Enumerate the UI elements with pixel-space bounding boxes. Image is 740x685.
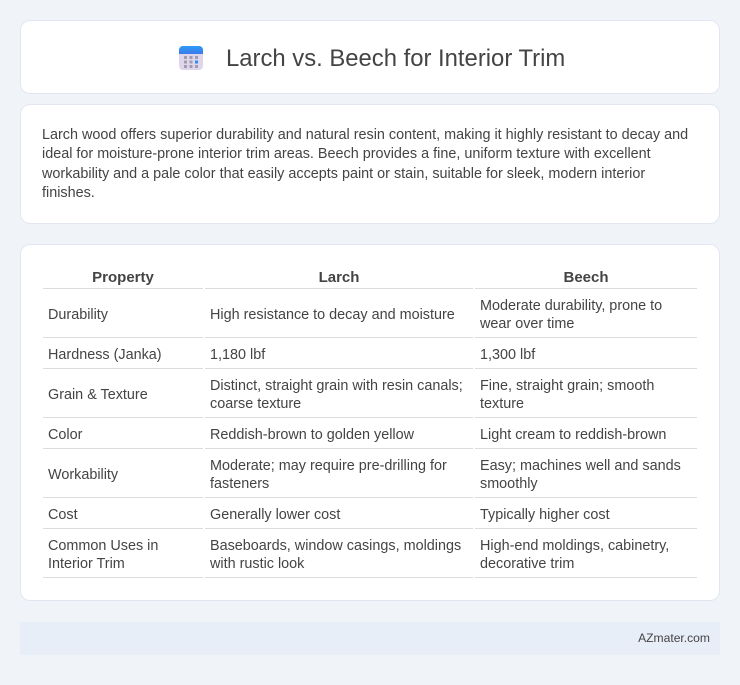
title: Larch vs. Beech for Interior Trim (226, 45, 565, 72)
table header: Property (92, 269, 154, 286)
row: color: Reddish-brown to golden yellow (210, 427, 414, 443)
row: common uses: Common Uses in (48, 538, 158, 554)
row: hardness: 1,300 lbf (480, 347, 535, 363)
row: color: Light cream to reddish-brown (480, 427, 666, 443)
row: workability: smoothly (480, 476, 538, 492)
row: common uses (48, 538, 669, 572)
row: durability (48, 298, 662, 332)
row: cost (48, 507, 610, 523)
panel: summary card (20, 104, 720, 224)
row: common uses: with rustic look (210, 556, 304, 572)
row: workability: fasteners (210, 476, 269, 492)
row: workability (48, 458, 681, 492)
row lines (43, 337, 697, 578)
row: color (48, 427, 666, 443)
icon: calendar (179, 46, 203, 70)
row: common uses: High-end moldings, cabinetry, (480, 538, 669, 554)
row: grain and texture: texture (480, 396, 524, 412)
row: cost: Typically higher cost (480, 507, 610, 523)
row: grain and texture (48, 378, 654, 412)
summary text (42, 127, 688, 201)
row: durability: wear over time (480, 316, 574, 332)
row: grain and texture: Distinct, straight grain with resin canals; (210, 378, 463, 394)
row: workability: Moderate; may require pre-drilling for (210, 458, 447, 474)
panel: title card (20, 20, 720, 94)
row: durability: Moderate durability, prone to (480, 298, 662, 314)
summary text: finishes. (42, 185, 95, 201)
footer bar (20, 622, 720, 655)
table header: Beech (563, 269, 609, 286)
row: grain and texture: Grain & Texture (48, 387, 148, 403)
summary text: Larch wood offers superior durability and natural resin content, making it highly resistant to decay and (42, 127, 688, 143)
row: common uses: Interior Trim (48, 556, 125, 572)
row: durability: Durability (48, 307, 108, 323)
summary text: ideal for moisture-prone interior trim areas. Beech provides a fine, uniform texture with excellent (42, 146, 651, 162)
summary text: workability and a pale color that easily accepts paint or stain, suitable for sleek, modern interior (42, 166, 645, 182)
table header: Larch (319, 269, 359, 286)
row: grain and texture: coarse texture (210, 396, 301, 412)
row: workability: Workability (48, 467, 118, 483)
row: common uses: Baseboards, window casings, moldings (210, 538, 461, 554)
row: hardness (48, 347, 536, 363)
row: color: Color (48, 427, 82, 443)
table header (43, 269, 697, 289)
row: hardness: 1,180 lbf (210, 347, 265, 363)
row: cost: Cost (48, 507, 78, 523)
panel: comparison table card (20, 244, 720, 601)
footer credit: AZmater.com (638, 631, 710, 645)
row: grain and texture: Fine, straight grain; smooth (480, 378, 654, 394)
row: durability: High resistance to decay and moisture (210, 307, 455, 323)
row: common uses: decorative trim (480, 556, 574, 572)
row: workability: Easy; machines well and sands (480, 458, 681, 474)
row: hardness: Hardness (Janka) (48, 347, 162, 363)
row: cost: Generally lower cost (210, 507, 340, 523)
